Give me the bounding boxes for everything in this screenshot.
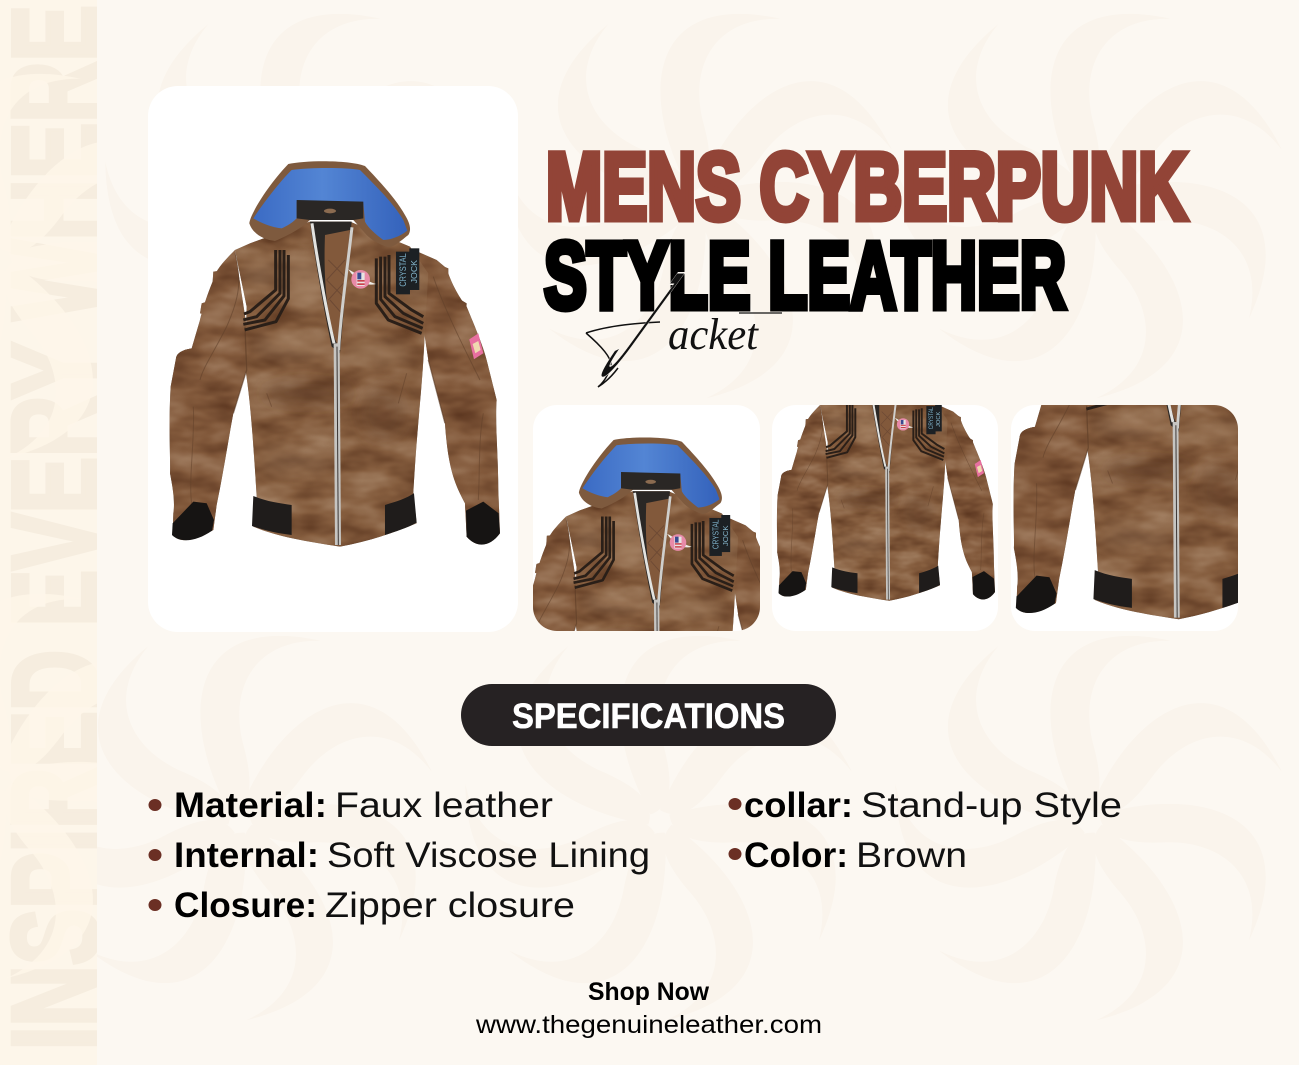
- main product card: [148, 86, 518, 632]
- call to action: [475, 978, 822, 1039]
- closure: [148, 886, 575, 925]
- thumbnail: lower sleeve detail: [1011, 405, 1238, 631]
- collar: collar:: [744, 786, 853, 825]
- thumbnail: collar close-up: [533, 405, 760, 631]
- collar: Stand-up Style: [861, 786, 1122, 825]
- specifications left column: [148, 786, 650, 925]
- main jacket photo: [170, 161, 500, 547]
- script word Jacket: [572, 241, 782, 409]
- website: www.thegenuineleather.com: [475, 1011, 822, 1039]
- closure: Closure:: [174, 886, 317, 925]
- internal: Internal:: [174, 836, 319, 875]
- internal: Soft Viscose Lining: [327, 836, 650, 875]
- collar: [728, 786, 1122, 825]
- title line 2: STYLE LEATHER: [544, 223, 1066, 329]
- closure: Zipper closure: [325, 886, 575, 925]
- title: [544, 134, 1187, 329]
- material: [148, 786, 553, 825]
- material: Faux leather: [335, 786, 553, 825]
- color: Color:: [744, 836, 848, 875]
- color: Brown: [856, 836, 967, 875]
- specifications pill: [461, 684, 836, 746]
- script word Jacket: acket: [668, 310, 760, 359]
- thumbnail: body view: [772, 405, 998, 631]
- material: Material:: [174, 786, 327, 825]
- color: [728, 836, 967, 875]
- internal: [148, 836, 650, 875]
- specifications pill: SPECIFICATIONS: [512, 697, 785, 736]
- shop now: Shop Now: [588, 978, 710, 1006]
- specifications right column: [728, 786, 1122, 875]
- script word Jacket: J: [572, 241, 711, 409]
